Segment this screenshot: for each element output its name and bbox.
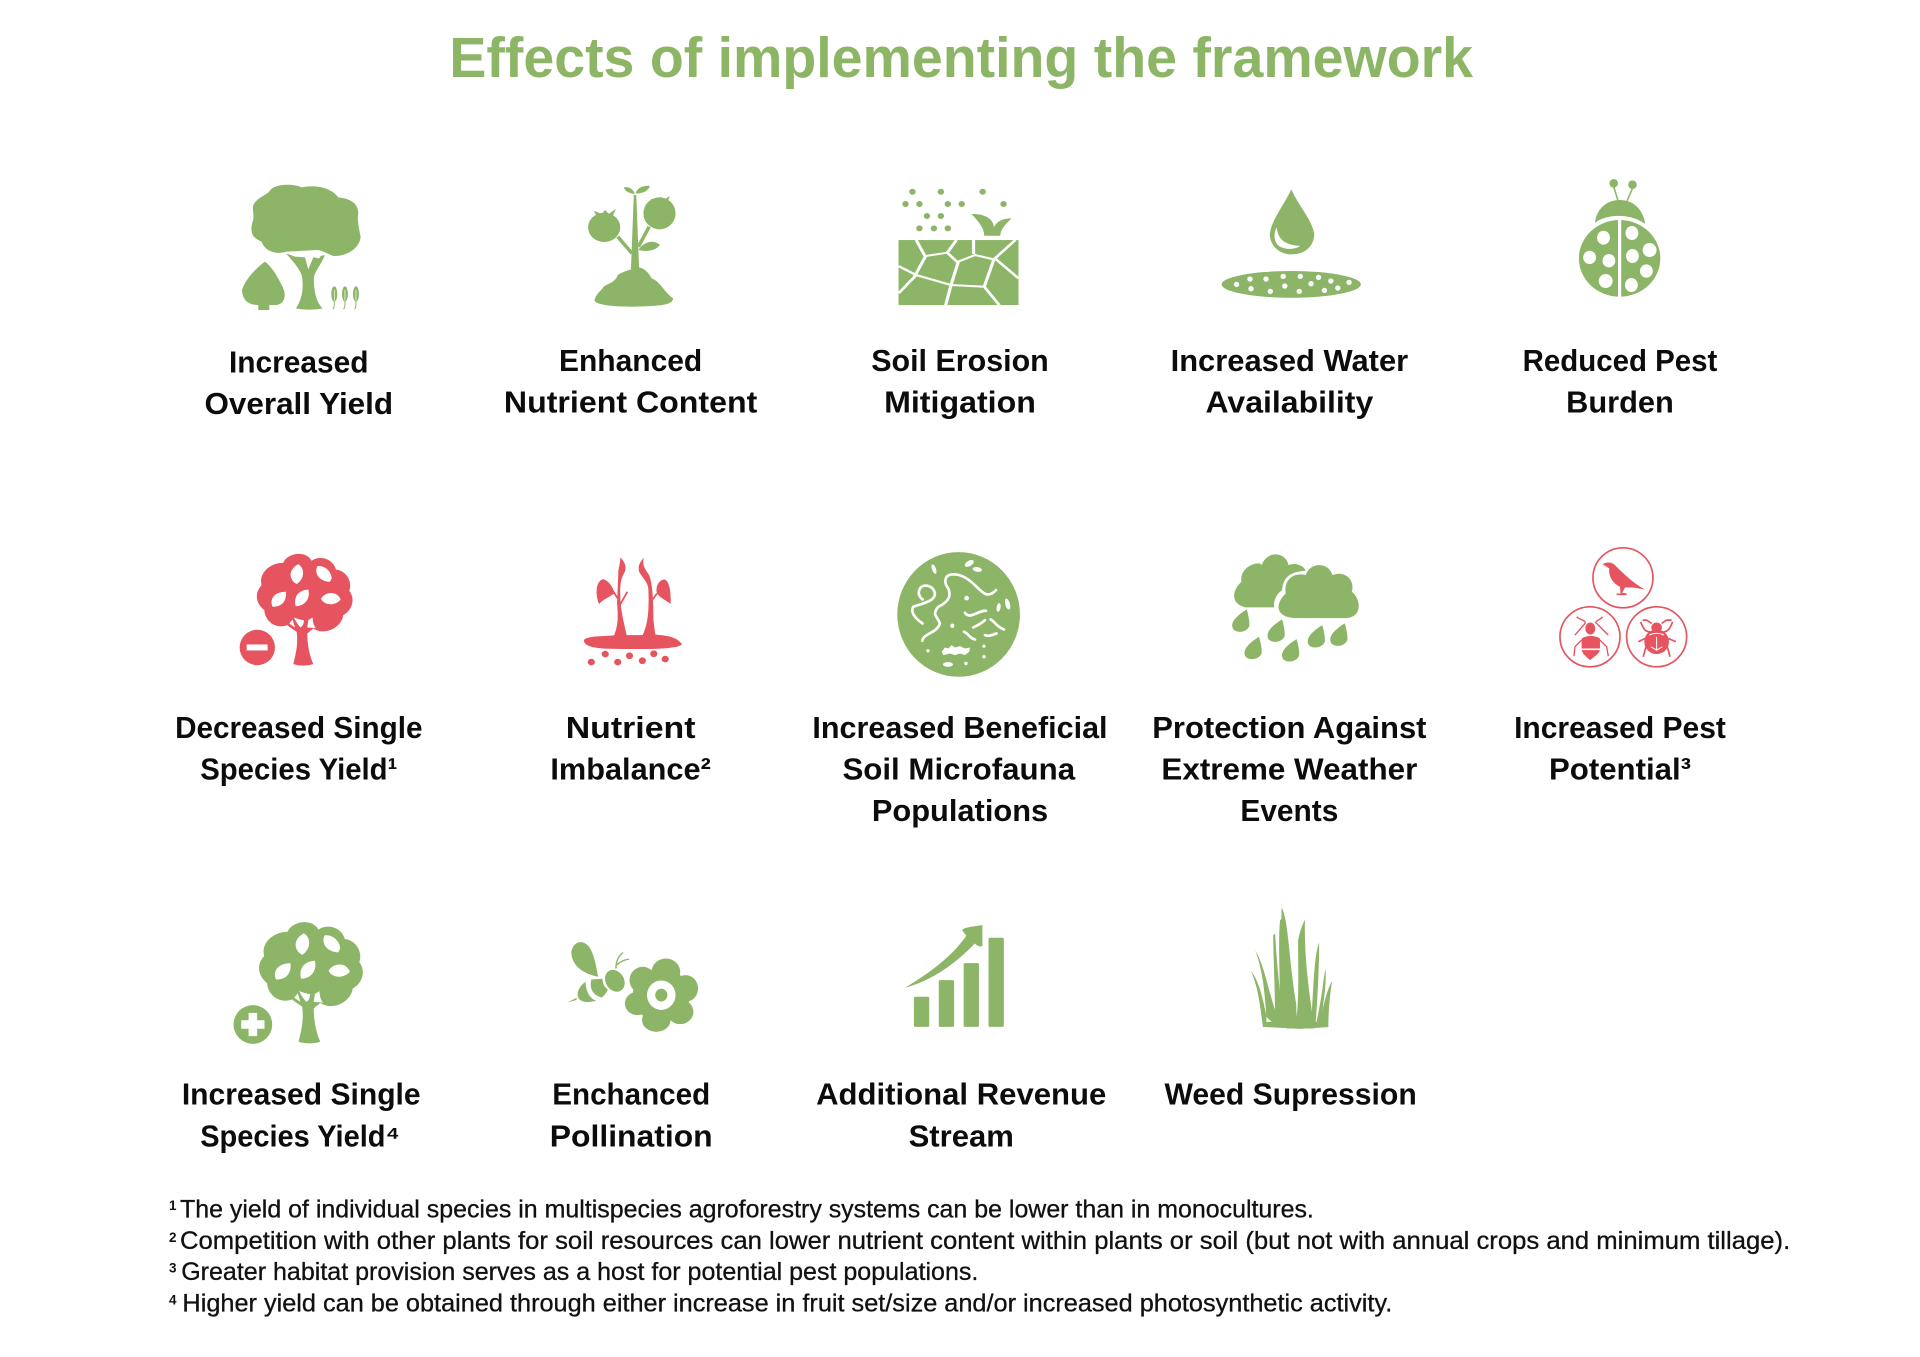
- label: Increased Beneficial: [812, 711, 1108, 745]
- panel: increased water availability: [1171, 189, 1408, 420]
- label: Increased Pest: [1514, 711, 1726, 745]
- label: Overall Yield: [204, 387, 393, 421]
- panel: soil erosion mitigation: [871, 189, 1049, 420]
- label: Decreased Single: [175, 711, 422, 745]
- label: Nutrient Content: [504, 386, 757, 420]
- label: Soil Erosion: [871, 344, 1049, 378]
- icon: green tree with plus sign: [234, 922, 363, 1044]
- panel: increased overall yield: [204, 185, 393, 421]
- label: Species Yield¹: [200, 753, 397, 787]
- footnotes: Competition with other plants for soil resources can lower nutrient content within plants or soil (but not with annual crops and minimum tillage).: [180, 1227, 1790, 1255]
- label: Species Yield⁴: [200, 1119, 400, 1153]
- icon: cracked soil with seeds and sprout: [899, 189, 1019, 305]
- label: Increased: [229, 345, 369, 379]
- label: [871, 344, 1049, 420]
- icon: fruit plant on soil mound: [588, 186, 676, 307]
- footnotes: 3: [169, 1260, 176, 1275]
- icon: water drop over puddle: [1222, 189, 1361, 298]
- panel: enhanced nutrient content: [504, 186, 757, 420]
- icon: red tree with minus sign: [240, 554, 353, 666]
- label: [1514, 711, 1726, 787]
- panel: increased pest potential: [1514, 548, 1726, 787]
- panel: increased single species yield: [182, 922, 421, 1153]
- label: Availability: [1206, 386, 1373, 420]
- label: Burden: [1566, 386, 1674, 420]
- footnotes: Greater habitat provision serves as a host for potential pest populations.: [181, 1258, 978, 1286]
- label: Weed Supression: [1164, 1078, 1417, 1112]
- panel: weed suppression: [1164, 907, 1417, 1112]
- panel: additional revenue stream: [816, 925, 1106, 1153]
- label: Increased Single: [182, 1078, 421, 1112]
- label: Events: [1240, 794, 1338, 828]
- label: Enchanced: [552, 1078, 710, 1112]
- icon: soil circle with worms: [897, 552, 1020, 677]
- icon: clouds and rain: [1232, 554, 1359, 662]
- icon: red seedlings and nutrient dots: [584, 557, 682, 665]
- label: Stream: [909, 1119, 1014, 1153]
- label: [204, 345, 393, 421]
- label: [812, 711, 1108, 828]
- footnotes: 1: [169, 1198, 177, 1213]
- label: [175, 711, 422, 787]
- panel: nutrient imbalance: [550, 557, 711, 787]
- label: Pollination: [550, 1119, 713, 1153]
- label: [1152, 711, 1427, 828]
- icon: bee and flower: [567, 942, 698, 1032]
- label: Enhanced: [559, 344, 702, 378]
- label: [1523, 344, 1717, 420]
- icon: grass tuft: [1251, 907, 1332, 1029]
- label: Nutrient: [566, 711, 696, 745]
- label: [550, 711, 711, 787]
- panel: decreased single species yield: [175, 554, 422, 787]
- icon: ladybug: [1579, 179, 1660, 298]
- footnotes: 2: [169, 1230, 176, 1245]
- label: Reduced Pest: [1523, 344, 1717, 378]
- label: [550, 1078, 713, 1153]
- label: [1171, 344, 1408, 420]
- label: Additional Revenue: [816, 1078, 1106, 1112]
- icon: bird and beetles in circles: [1560, 548, 1687, 667]
- label: Imbalance²: [550, 753, 711, 787]
- icon: bar chart with rising arrow: [905, 925, 1004, 1027]
- title: Effects of implementing the framework: [449, 26, 1474, 89]
- label: Extreme Weather: [1161, 753, 1417, 787]
- panel: protection against extreme weather events: [1152, 554, 1427, 828]
- panel: increased beneficial soil microfauna populations: [812, 552, 1108, 828]
- label: Soil Microfauna: [842, 753, 1076, 787]
- icon: trees and wheat: [242, 185, 361, 310]
- footnotes: [169, 1195, 1790, 1318]
- footnotes: Higher yield can be obtained through either increase in fruit set/size and/or increased photosynthetic activity.: [182, 1290, 1392, 1318]
- label: Potential³: [1549, 753, 1691, 787]
- label: Protection Against: [1152, 711, 1427, 745]
- label: [504, 344, 757, 420]
- label: Populations: [872, 794, 1048, 828]
- label: Mitigation: [884, 386, 1036, 420]
- label: [816, 1078, 1106, 1153]
- label: Increased Water: [1171, 344, 1408, 378]
- label: [182, 1078, 421, 1153]
- panel: reduced pest burden: [1523, 179, 1717, 420]
- footnotes: 4: [169, 1292, 177, 1307]
- footnotes: The yield of individual species in multispecies agroforestry systems can be lower than in monocultures.: [180, 1195, 1314, 1223]
- panel: enhanced pollination: [550, 942, 713, 1153]
